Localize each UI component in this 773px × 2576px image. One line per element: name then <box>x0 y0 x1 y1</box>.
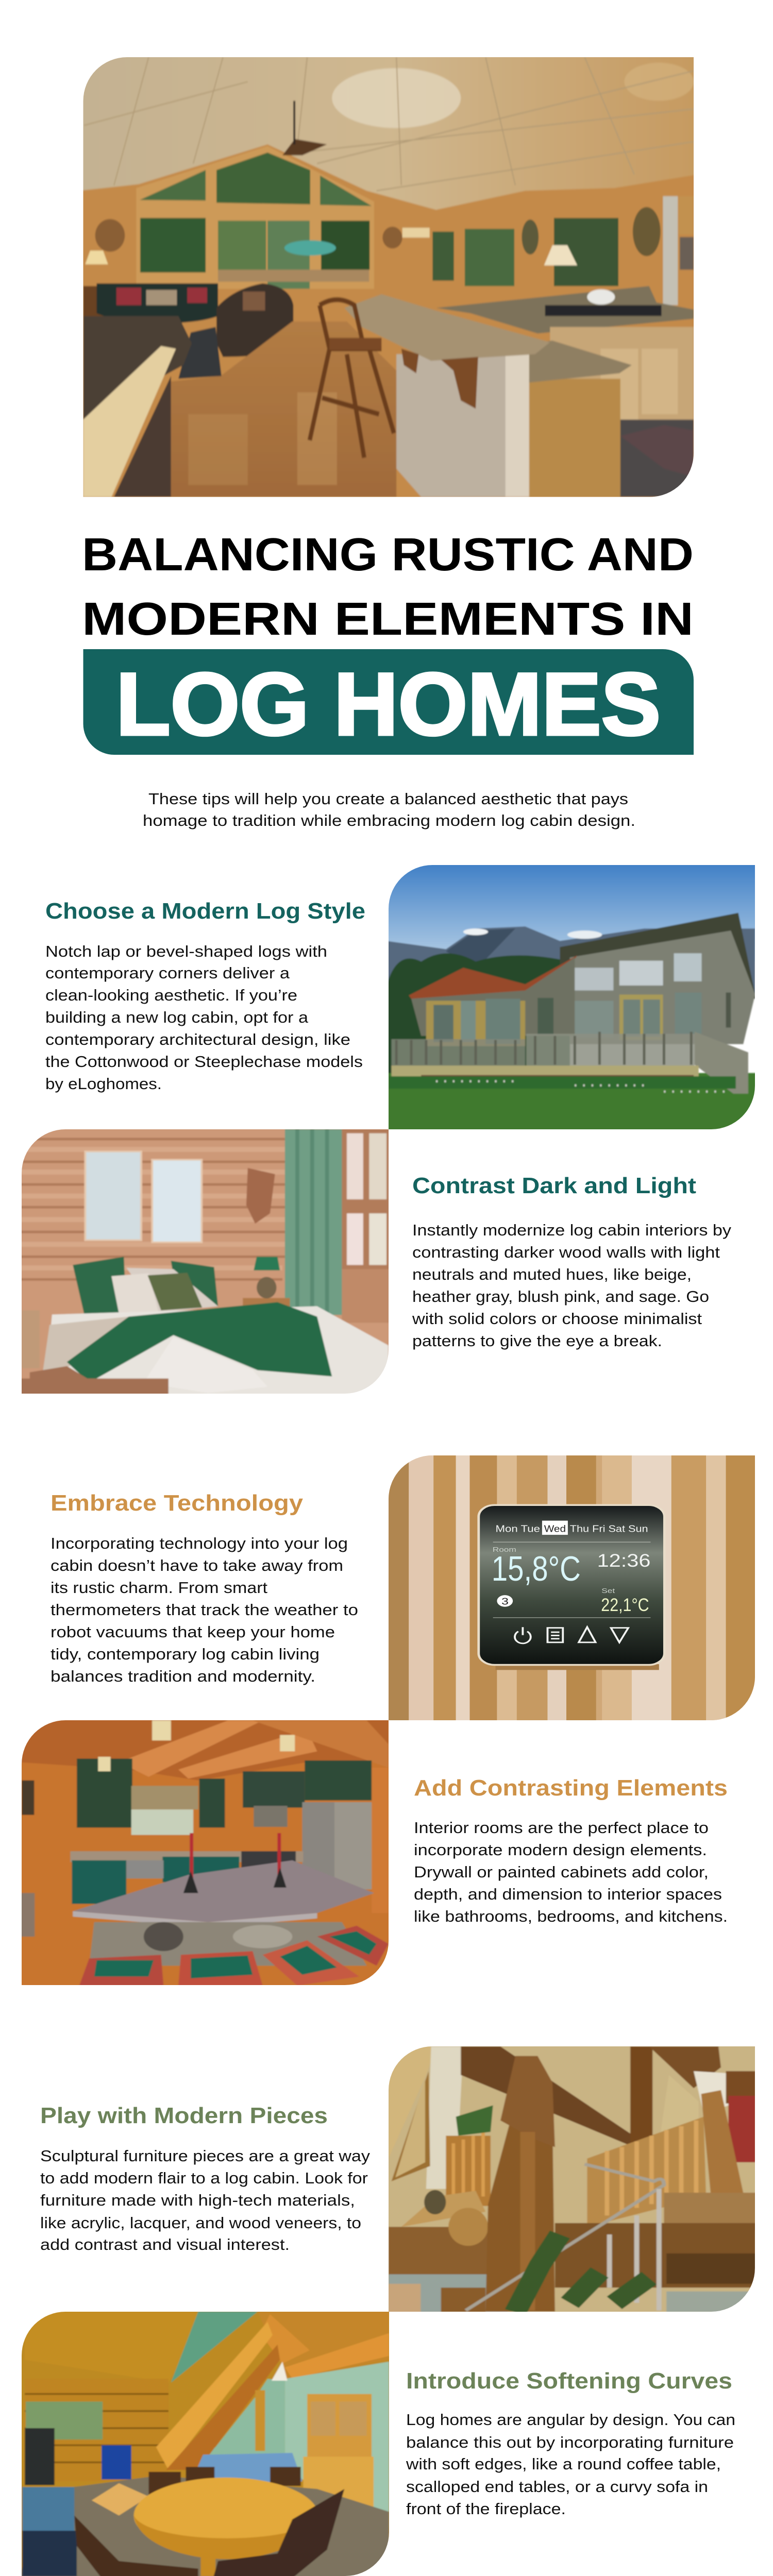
thermostat readout <box>492 1521 650 1615</box>
body text: front of the fireplace. <box>406 2500 566 2518</box>
panel: play with modern pieces <box>40 2044 758 2314</box>
title <box>82 529 694 645</box>
body text: contemporary architectural design, like <box>45 1030 350 1048</box>
photo: modern log house exterior <box>386 862 758 1131</box>
body text: with soft edges, like a round coffee table, <box>406 2455 721 2473</box>
body text: robot vacuums that keep your home <box>51 1623 335 1641</box>
intro text: These tips will help you create a balanced aesthetic that pays <box>148 790 628 808</box>
body text: incorporate modern design elements. <box>414 1841 707 1859</box>
photo: smart thermostat on wood wall <box>386 1453 758 1722</box>
heading: Contrast Dark and Light <box>412 1173 696 1198</box>
body text <box>51 1534 358 1685</box>
body text: like bathrooms, bedrooms, and kitchens. <box>414 1907 728 1925</box>
body text: Sculptural furniture pieces are a great way <box>40 2147 371 2165</box>
thermostat readout: Thu Fri Sat Sun <box>570 1523 648 1534</box>
body text: by eLoghomes. <box>45 1075 162 1093</box>
intro text <box>143 790 635 829</box>
body text <box>414 1819 728 1925</box>
body text: add contrast and visual interest. <box>40 2235 290 2253</box>
body text: Drywall or painted cabinets add color, <box>414 1863 709 1881</box>
heading: Introduce Softening Curves <box>406 2368 732 2394</box>
body text: clean-looking aesthetic. If you’re <box>45 986 297 1004</box>
body text: heather gray, blush pink, and sage. Go <box>412 1287 709 1306</box>
panel: choose a modern log style <box>45 862 758 1131</box>
body text <box>406 2411 735 2518</box>
photo: carved log column and staircase <box>386 2044 758 2314</box>
thermostat readout: Mon Tue <box>496 1523 540 1534</box>
body text: balance this out by incorporating furniture <box>406 2433 734 2451</box>
heading: Play with Modern Pieces <box>40 2103 328 2128</box>
body text: to add modern flair to a log cabin. Look for <box>40 2169 368 2187</box>
thermostat readout: Set <box>601 1587 615 1595</box>
body text: patterns to give the eye a break. <box>412 1332 662 1350</box>
photo: pine dining room with round table <box>20 2311 392 2576</box>
thermostat readout: 12:36 <box>597 1550 650 1571</box>
hero photo: open-plan log home interior <box>79 55 699 501</box>
panel: contrast dark and light <box>20 1127 732 1395</box>
thermostat readout: Wed <box>544 1523 566 1534</box>
body text: contemporary corners deliver a <box>45 964 290 982</box>
photo: kitchen with green cabinets and granite island <box>20 1719 392 1988</box>
title banner: log homes: LOG HOMES <box>116 655 661 754</box>
body text: depth, and dimension to interior spaces <box>414 1885 722 1903</box>
body text: balances tradition and modernity. <box>51 1667 315 1685</box>
body text: Interior rooms are the perfect place to <box>414 1819 709 1837</box>
body text: thermometers that track the weather to <box>51 1601 358 1619</box>
panel: add contrasting elements <box>20 1719 728 1988</box>
heading: Add Contrasting Elements <box>414 1775 728 1801</box>
body text: neutrals and muted hues, like beige, <box>412 1265 692 1283</box>
thermostat readout: 3 <box>501 1596 509 1607</box>
thermostat readout: 22,1°C <box>601 1595 649 1615</box>
photo: bedroom with log walls and green bedding <box>20 1127 392 1395</box>
body text: like acrylic, lacquer, and wood veneers, to <box>40 2214 361 2232</box>
body text: Notch lap or bevel-shaped logs with <box>45 942 327 960</box>
panel: introduce softening curves <box>20 2311 735 2576</box>
body text: Instantly modernize log cabin interiors by <box>412 1221 732 1239</box>
body text: contrasting darker wood walls with light <box>412 1243 720 1261</box>
title: MODERN ELEMENTS IN <box>82 594 694 645</box>
heading: Choose a Modern Log Style <box>45 899 365 924</box>
body text: cabin doesn’t have to take away from <box>51 1556 343 1574</box>
body text: the Cottonwood or Steeplechase models <box>45 1053 363 1071</box>
body text: building a new log cabin, opt for a <box>45 1008 309 1026</box>
body text: furniture made with high-tech materials, <box>40 2191 355 2209</box>
body text: Incorporating technology into your log <box>51 1534 348 1552</box>
body text: scalloped end tables, or a curvy sofa in <box>406 2478 708 2496</box>
heading: Embrace Technology <box>51 1490 304 1516</box>
thermostat readout: Room <box>493 1546 516 1554</box>
body text: with solid colors or choose minimalist <box>412 1310 702 1328</box>
panel: embrace technology <box>51 1453 758 1722</box>
body text: its rustic charm. From smart <box>51 1579 267 1597</box>
thermostat readout: 15,8°C <box>492 1550 581 1588</box>
body text <box>45 942 363 1093</box>
body text <box>412 1221 732 1350</box>
body text: tidy, contemporary log cabin living <box>51 1645 320 1663</box>
title: BALANCING RUSTIC AND <box>82 529 694 581</box>
intro text: homage to tradition while embracing modern log cabin design. <box>143 811 635 829</box>
body text <box>40 2147 371 2253</box>
body text: Log homes are angular by design. You can <box>406 2411 735 2429</box>
